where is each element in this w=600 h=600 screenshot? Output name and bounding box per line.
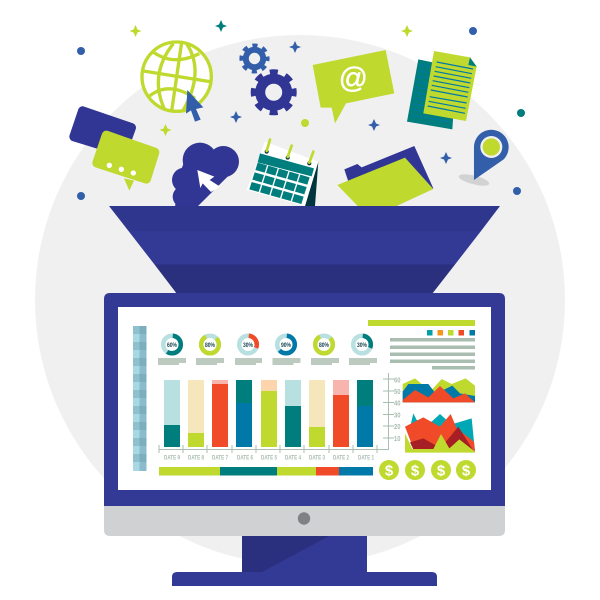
donut 90%: 90% <box>281 342 291 349</box>
date labels: DATE 8 <box>188 454 204 462</box>
checker column <box>133 326 146 471</box>
dollar coins <box>379 460 476 480</box>
date labels <box>164 454 374 462</box>
donut 30%: 30% <box>243 342 253 349</box>
donut 80% <box>198 332 222 357</box>
legend heading bar <box>368 320 475 326</box>
icon: documents <box>407 51 477 129</box>
date labels: DATE 6 <box>237 454 253 462</box>
monitor frame <box>104 293 505 536</box>
donut 60%: 60% <box>167 342 177 349</box>
date labels: DATE 9 <box>164 454 180 462</box>
icon: globe with cursor <box>142 42 212 122</box>
axis values: 10 <box>394 434 400 443</box>
donut gauges <box>162 332 372 357</box>
axis values: 50 <box>394 387 400 396</box>
coin 1: $ <box>385 462 394 480</box>
icon: large gear <box>254 72 294 112</box>
segmented progress bar <box>159 467 373 476</box>
donut 30% second: 30% <box>357 342 367 349</box>
donut 90% <box>276 335 296 354</box>
donut 80% second <box>312 332 336 357</box>
icon: chat bubbles <box>74 111 155 191</box>
axis values <box>394 376 400 443</box>
icon: location pin <box>458 130 509 188</box>
chart axes <box>159 373 394 453</box>
date labels: DATE 3 <box>309 454 325 462</box>
icon: cloud with arrow <box>172 143 239 207</box>
donut 30% <box>238 335 258 354</box>
axis values: 60 <box>394 376 400 384</box>
date labels: DATE 1 <box>358 454 374 462</box>
legend text lines <box>390 338 475 370</box>
background circle <box>35 35 565 565</box>
coin 2: $ <box>411 462 420 480</box>
axis values: 40 <box>394 398 400 408</box>
date labels: DATE 7 <box>212 454 228 462</box>
coin 3: $ <box>437 462 446 480</box>
funnel <box>109 206 500 294</box>
date labels: DATE 2 <box>333 454 349 462</box>
upper area chart <box>403 378 475 402</box>
coin 4: $ <box>462 462 471 480</box>
icon: small gear <box>242 46 267 71</box>
legend swatches <box>427 330 475 336</box>
lower area chart <box>405 413 475 453</box>
icon: at-sign speech bubble <box>313 50 394 123</box>
icon: folder <box>337 146 433 207</box>
monitor stand <box>172 535 437 586</box>
axis values: 20 <box>394 422 400 431</box>
axis values: 30 <box>394 410 400 420</box>
donut 60% <box>162 335 182 354</box>
date labels: DATE 4 <box>285 454 301 462</box>
donut caption lines <box>158 358 377 365</box>
donut 30% second <box>352 335 372 354</box>
icon: at-sign speech bubble: @ <box>339 63 368 95</box>
date labels: DATE 5 <box>261 454 277 462</box>
icon: calendar <box>247 140 318 206</box>
stacked bar chart <box>164 380 373 447</box>
donut 80% second: 80% <box>319 342 329 349</box>
decorative dots and sparkles <box>77 20 525 200</box>
calendar date cells <box>249 163 310 204</box>
donut 80%: 80% <box>205 342 215 349</box>
